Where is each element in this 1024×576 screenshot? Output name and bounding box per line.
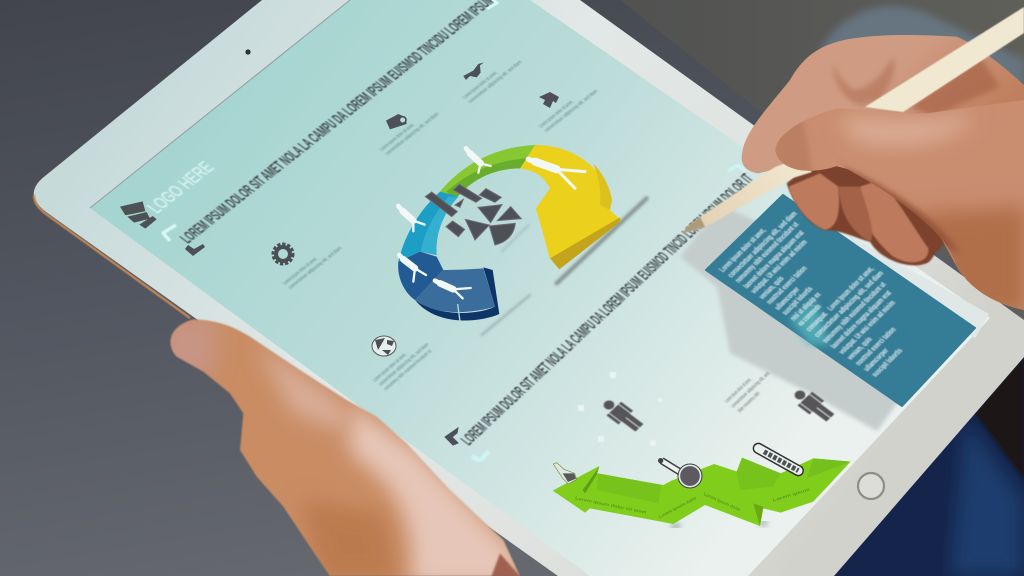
- text: teal card: suscipit lobortis: [869, 346, 904, 378]
- segment: yellow arrow: [520, 145, 621, 269]
- arrow marker: top heading: [163, 225, 176, 241]
- hand shadow on screen: [680, 205, 920, 431]
- text: teal card: ullamcorper: [772, 285, 802, 311]
- icon: t-shirt: [539, 92, 559, 108]
- text: teal card: nisl ut aliquip ex: [787, 290, 823, 322]
- text block: globe: [372, 338, 436, 392]
- text block: gear: consectetuer adipiscing elit, sed diam: [287, 246, 344, 290]
- arc shadows: [482, 198, 647, 335]
- arrow marker: top right: [487, 0, 497, 9]
- text: teal card: laoreet dolore magna aliquam erat: [741, 228, 806, 290]
- text: teal card: ullamcorper: [861, 346, 891, 373]
- text: teal card: ea commodo: [795, 302, 823, 327]
- text block: globe: nonummy nibh euismod tincidunt ut: [383, 349, 434, 392]
- text block: person right: [724, 366, 778, 414]
- text: teal card: Lorem ipsum dolor sit amet,: [717, 226, 768, 273]
- icon: front camera: [245, 49, 251, 55]
- panel: teal text card: [706, 195, 989, 406]
- logo icon: [120, 201, 157, 229]
- text: teal card: Lorem ipsum dolor sit amet,: [825, 265, 876, 312]
- text block: person right: diam nonummy nibh: [737, 391, 762, 414]
- thumb: [775, 100, 1024, 310]
- text: teal card: volutpat. Ut wisi enim ad minim: [836, 298, 897, 356]
- flask icon: [553, 463, 577, 484]
- text: teal card: nonummy nibh euismod tincidunt ut: [820, 280, 888, 344]
- test tube icon: [758, 448, 798, 471]
- icon: gear: [274, 245, 292, 263]
- arrow shadow: [672, 522, 767, 527]
- arrow folds: [583, 467, 599, 493]
- text: teal card: consectetuer adipiscing elit, sed diam: [811, 269, 886, 339]
- icon: person right: [789, 385, 838, 425]
- text: teal card: suscipit lobortis: [779, 284, 815, 317]
- segment: blue end: [415, 267, 499, 322]
- text block: person right: Lorem ipsum dolor sit amet,: [724, 377, 753, 404]
- centre icon cluster: [425, 184, 521, 245]
- text: teal card: nostrud exerci tation: [852, 325, 898, 367]
- tick icon: lower heading: [445, 428, 458, 445]
- text: arrow labels: Lorem ipsum: [772, 487, 810, 503]
- markers: around person: [578, 372, 662, 446]
- text: arrow labels: Lorem ipsum dolor: [703, 491, 742, 512]
- stylus pencil: [683, 7, 1024, 233]
- icon: camera: [386, 114, 407, 129]
- text: teal card: laoreet dolore magna aliquam erat: [828, 288, 893, 350]
- text: teal card: nonummy nibh euismod tincidunt ut: [732, 220, 801, 284]
- text block: gear: Lorem ipsum dolor sit amet,: [282, 257, 319, 286]
- text block: camera: consectetuer adipiscing elit, sed diam: [384, 112, 441, 156]
- icon: person left: [598, 395, 647, 435]
- white person silhouettes: [398, 148, 585, 298]
- text: teal card: nostrud exerci tation: [764, 264, 809, 306]
- hand: right hand with pencil: [683, 7, 1024, 320]
- text: teal card: consectetuer adipiscing elit, sed diam: [725, 209, 799, 279]
- chart: circular arrow: [398, 145, 647, 335]
- text block: camera: Lorem ipsum dolor sit amet,: [379, 123, 416, 152]
- text: teal card: consequat.: [803, 309, 830, 333]
- text: arrow labels: [575, 487, 810, 519]
- segment: dark blue arc: [398, 252, 443, 300]
- text block: globe: Lorem ipsum dolor sit amet,: [372, 352, 409, 383]
- icon: glasses: [463, 62, 484, 80]
- text: teal card: [717, 203, 943, 378]
- icon: globe: [372, 336, 396, 356]
- logo text: LOGO HERE: [144, 159, 219, 217]
- hand: left thumb: [170, 318, 520, 576]
- tick icon: top heading: [185, 244, 205, 256]
- text: teal card: volutpat. Ut wisi enim ad minim: [748, 238, 809, 295]
- text block: person right: consectetuer adipiscing elit, sed: [730, 371, 772, 409]
- text block: glasses: consectetuer adipiscing elit, sed diam: [467, 60, 524, 104]
- text block: t-shirt: consectetuer adipiscing elit, sed diam: [543, 89, 600, 133]
- lower fingers: [787, 147, 980, 265]
- text: arrow labels: Lorem ipsum dolor: [658, 495, 698, 519]
- chart: green process arrow: [553, 448, 851, 527]
- text block: t-shirt: Lorem ipsum dolor sit amet,: [538, 100, 575, 129]
- text: teal card: veniam, quis: [756, 274, 786, 301]
- arrow marker: near pencil: [728, 165, 746, 172]
- segment: cyan arc: [398, 192, 458, 262]
- index finger and hand back: [742, 35, 1024, 310]
- text block: globe: consectetuer adipiscing elit, sed diam: [377, 342, 431, 387]
- arrow marker: lower heading: [472, 451, 489, 461]
- text: arrow labels: Lorem ipsum dolor sit amet: [575, 495, 648, 515]
- round flask icon: [658, 458, 702, 488]
- text: teal card: veniam, quis: [844, 335, 874, 361]
- arrow body: [553, 458, 851, 526]
- segment: green arc: [440, 145, 535, 200]
- text block: glasses: Lorem ipsum dolor sit amet,: [462, 71, 499, 100]
- icon: home button: [858, 473, 884, 499]
